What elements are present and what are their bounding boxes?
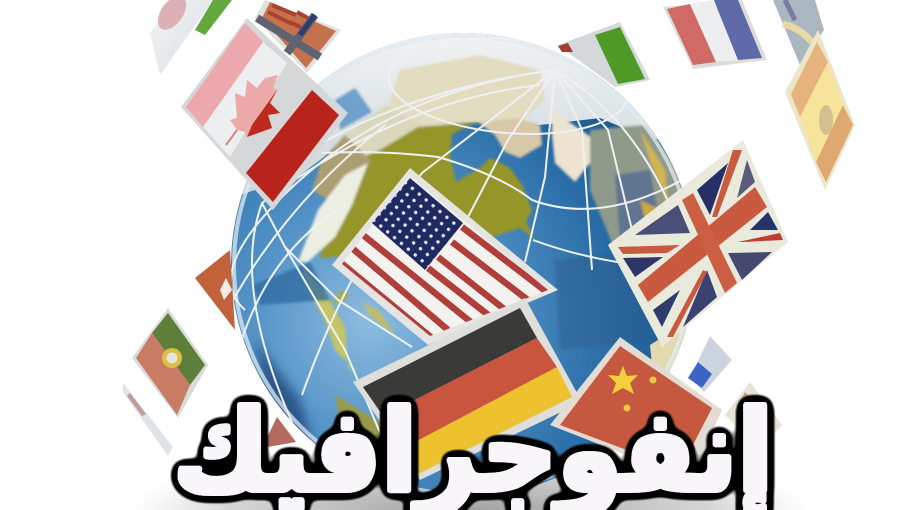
flag: China — [550, 337, 722, 480]
continents — [225, 30, 705, 500]
flag: UK top right — [773, 0, 824, 65]
flag: Norway — [255, 0, 341, 73]
flag: Brazil — [195, 0, 232, 35]
floor shadow — [120, 440, 820, 510]
Arctic islands — [478, 118, 542, 158]
flag: bottom red — [262, 417, 296, 448]
North America mainland — [318, 120, 536, 260]
flag: UK — [608, 140, 788, 347]
flag: Japan — [150, 0, 213, 75]
reflection of flag in lower ocean — [253, 262, 330, 305]
infographic illustration — [123, 0, 855, 510]
flag: Germany — [353, 298, 582, 480]
icon: globe — [225, 29, 705, 500]
flag: Portugal — [132, 308, 208, 418]
lower right cream glass — [650, 326, 687, 372]
pale northern land — [385, 55, 545, 128]
globe grid lines — [231, 37, 680, 436]
flag: bottom left — [123, 383, 173, 456]
flag: left partial — [195, 250, 235, 330]
upper-left ocean patch — [335, 88, 372, 130]
flag: Italy — [558, 22, 650, 87]
flag: small right lower — [725, 382, 782, 450]
flag: USA — [332, 168, 558, 345]
polar cap haze — [242, 33, 658, 194]
Greenland — [550, 111, 592, 184]
Central America — [302, 267, 358, 373]
right-side Europe haze — [588, 124, 682, 243]
South America — [334, 394, 381, 440]
flag: Spain — [785, 30, 855, 190]
flag: Canada — [181, 18, 348, 210]
flag: small right — [688, 336, 732, 392]
flag: France — [663, 0, 767, 69]
